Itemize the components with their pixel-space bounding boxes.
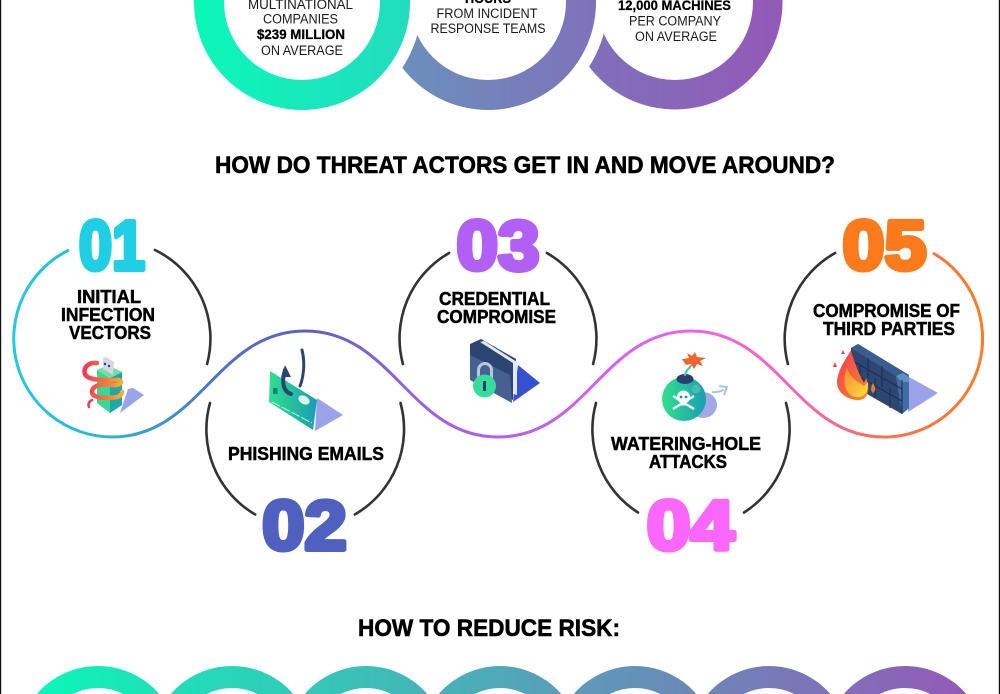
number 02: 02 — [262, 486, 347, 564]
label 01: VECTORS — [69, 323, 151, 343]
ring 2 — [171, 666, 293, 694]
label 04: WATERING-HOLE — [611, 434, 761, 454]
icon: hooked credit card — [269, 350, 343, 431]
ring 7 — [844, 666, 966, 694]
step 04 — [592, 352, 790, 564]
icon: locked folder — [470, 339, 540, 403]
label 01: INFECTION — [61, 305, 155, 325]
label 05 — [813, 301, 960, 339]
ring 1: cost: COMPANIES — [263, 12, 338, 26]
step 02 — [206, 350, 404, 564]
ring 3 — [305, 666, 427, 694]
icon: burning firewall — [833, 344, 938, 414]
number 01: 01 — [79, 206, 145, 284]
icon: usb with snake — [85, 357, 144, 413]
ring 3: machines: PER COMPANY — [629, 14, 721, 28]
step 03 — [400, 206, 596, 403]
ring 3: machines — [368, 0, 782, 122]
label 01: INITIAL — [77, 287, 141, 307]
number 04: 04 — [647, 486, 734, 564]
ring 1 — [37, 666, 159, 694]
icon: bomb — [662, 352, 727, 421]
ring 1: cost: ON AVERAGE — [261, 43, 343, 58]
label 02: PHISHING EMAILS — [228, 444, 384, 464]
step 01 — [61, 206, 210, 413]
ring 3: machines: ON AVERAGE — [635, 29, 717, 44]
ring 2: hours — [182, 0, 596, 122]
heading: threat actors: HOW DO THREAT ACTORS GET IN AND MOVE AROUND? — [215, 152, 835, 179]
label 03: CREDENTIAL — [439, 289, 550, 309]
ring 1: cost — [194, 0, 410, 110]
wave connector line — [14, 250, 983, 437]
ring 5 — [574, 666, 696, 694]
ring 4 — [439, 666, 561, 694]
ring 1: cost: $239 MILLION — [257, 27, 345, 42]
number 03: 03 — [456, 206, 540, 284]
heading: reduce risk: HOW TO REDUCE RISK: — [358, 615, 620, 642]
label 03: COMPROMISE — [437, 307, 556, 327]
label 04 — [611, 434, 761, 472]
label 05: THIRD PARTIES — [823, 319, 955, 339]
panel: top statistics rings — [182, 0, 782, 122]
label 04: ATTACKS — [649, 452, 727, 472]
label 05: COMPROMISE OF — [813, 301, 960, 321]
panel: risk reduction rings — [37, 666, 966, 694]
ring 6 — [708, 666, 830, 694]
ring 2: hours: FROM INCIDENT — [436, 6, 538, 21]
label 03 — [437, 289, 556, 327]
number 05: 05 — [842, 206, 926, 284]
step 05 — [785, 206, 960, 414]
label 01 — [61, 287, 155, 343]
ring 2: hours: RESPONSE TEAMS — [430, 21, 546, 36]
